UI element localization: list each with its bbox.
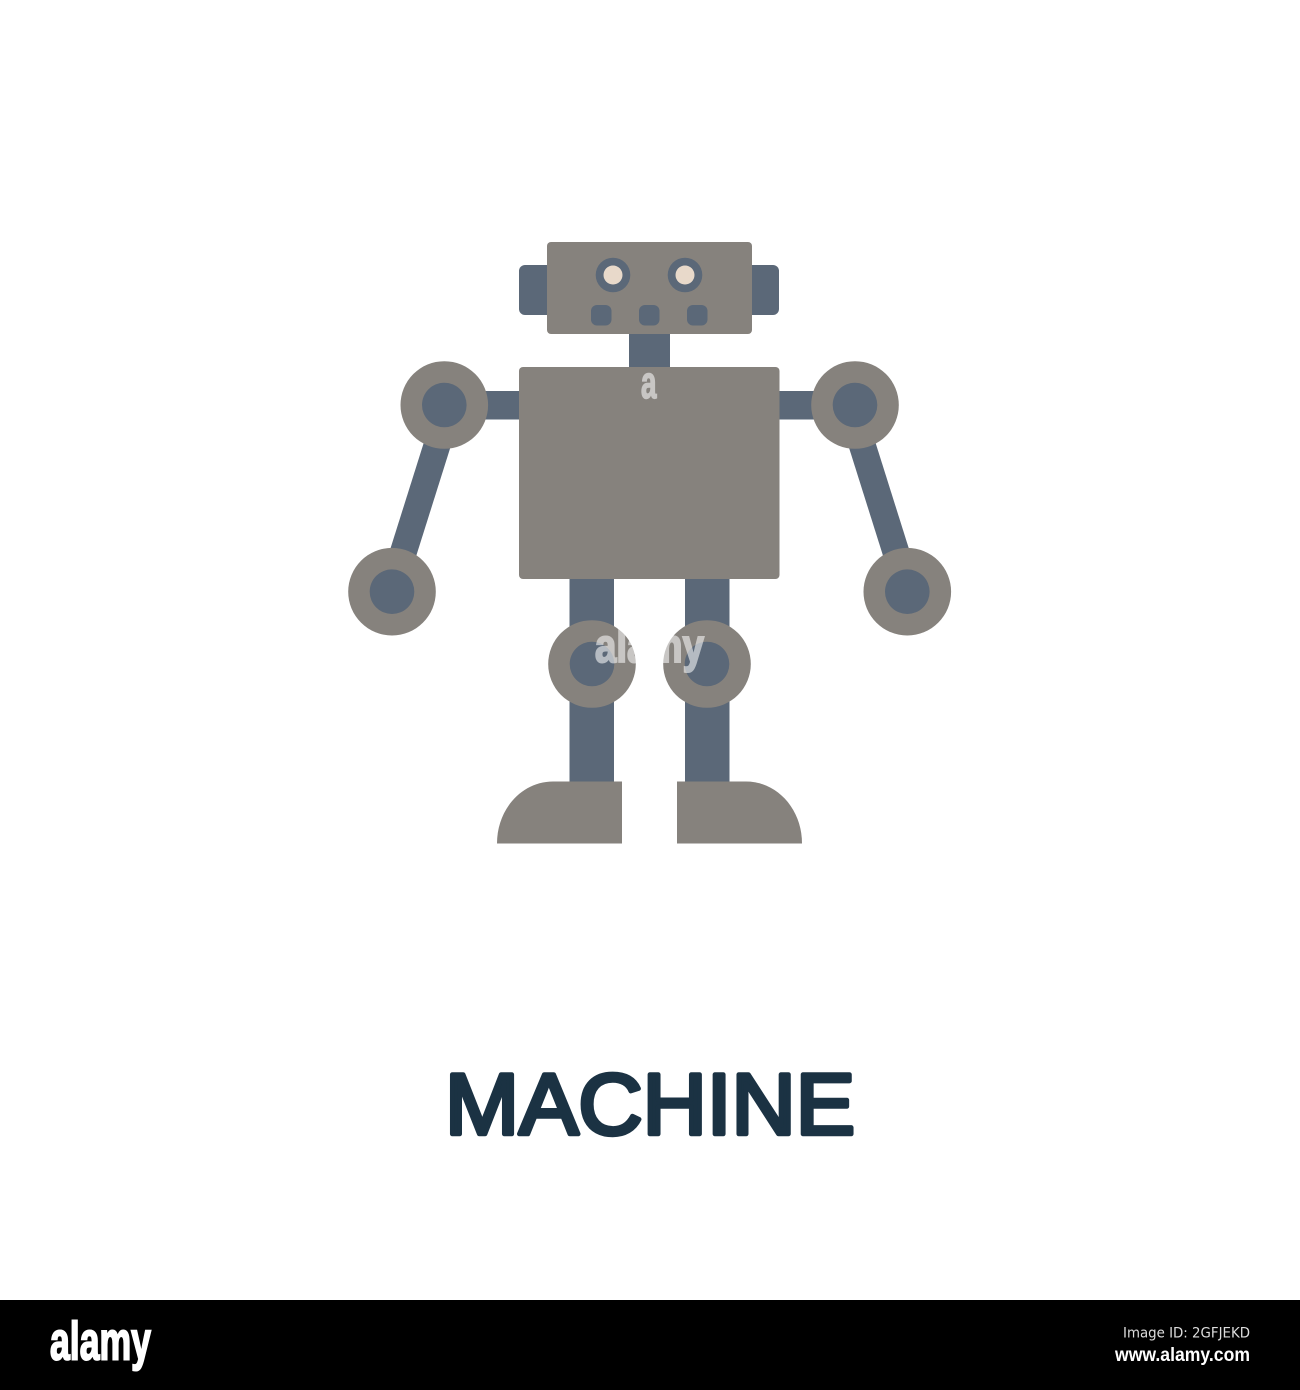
footer logo: alamy — [50, 1312, 151, 1372]
website: www.alamy.com — [1114, 1345, 1250, 1366]
robot left arm — [348, 361, 525, 636]
robot neck — [629, 330, 670, 372]
robot right eye — [668, 258, 702, 292]
robot right ear — [740, 265, 779, 315]
robot left ear — [519, 265, 559, 315]
robot mouth — [591, 305, 708, 326]
title: MACHINE — [445, 1057, 855, 1153]
robot right arm — [775, 361, 951, 636]
icon: robot — [348, 242, 951, 844]
footer bar — [0, 1300, 1300, 1390]
robot head — [547, 242, 752, 334]
robot left leg — [497, 570, 636, 844]
robot right leg — [663, 570, 802, 844]
image id: Image ID: 2GFJEKD — [1123, 1326, 1250, 1342]
watermark letter on body: a — [641, 357, 657, 408]
watermark over knees: alamy — [595, 619, 704, 672]
robot left eye — [596, 258, 630, 292]
robot body — [519, 367, 780, 579]
